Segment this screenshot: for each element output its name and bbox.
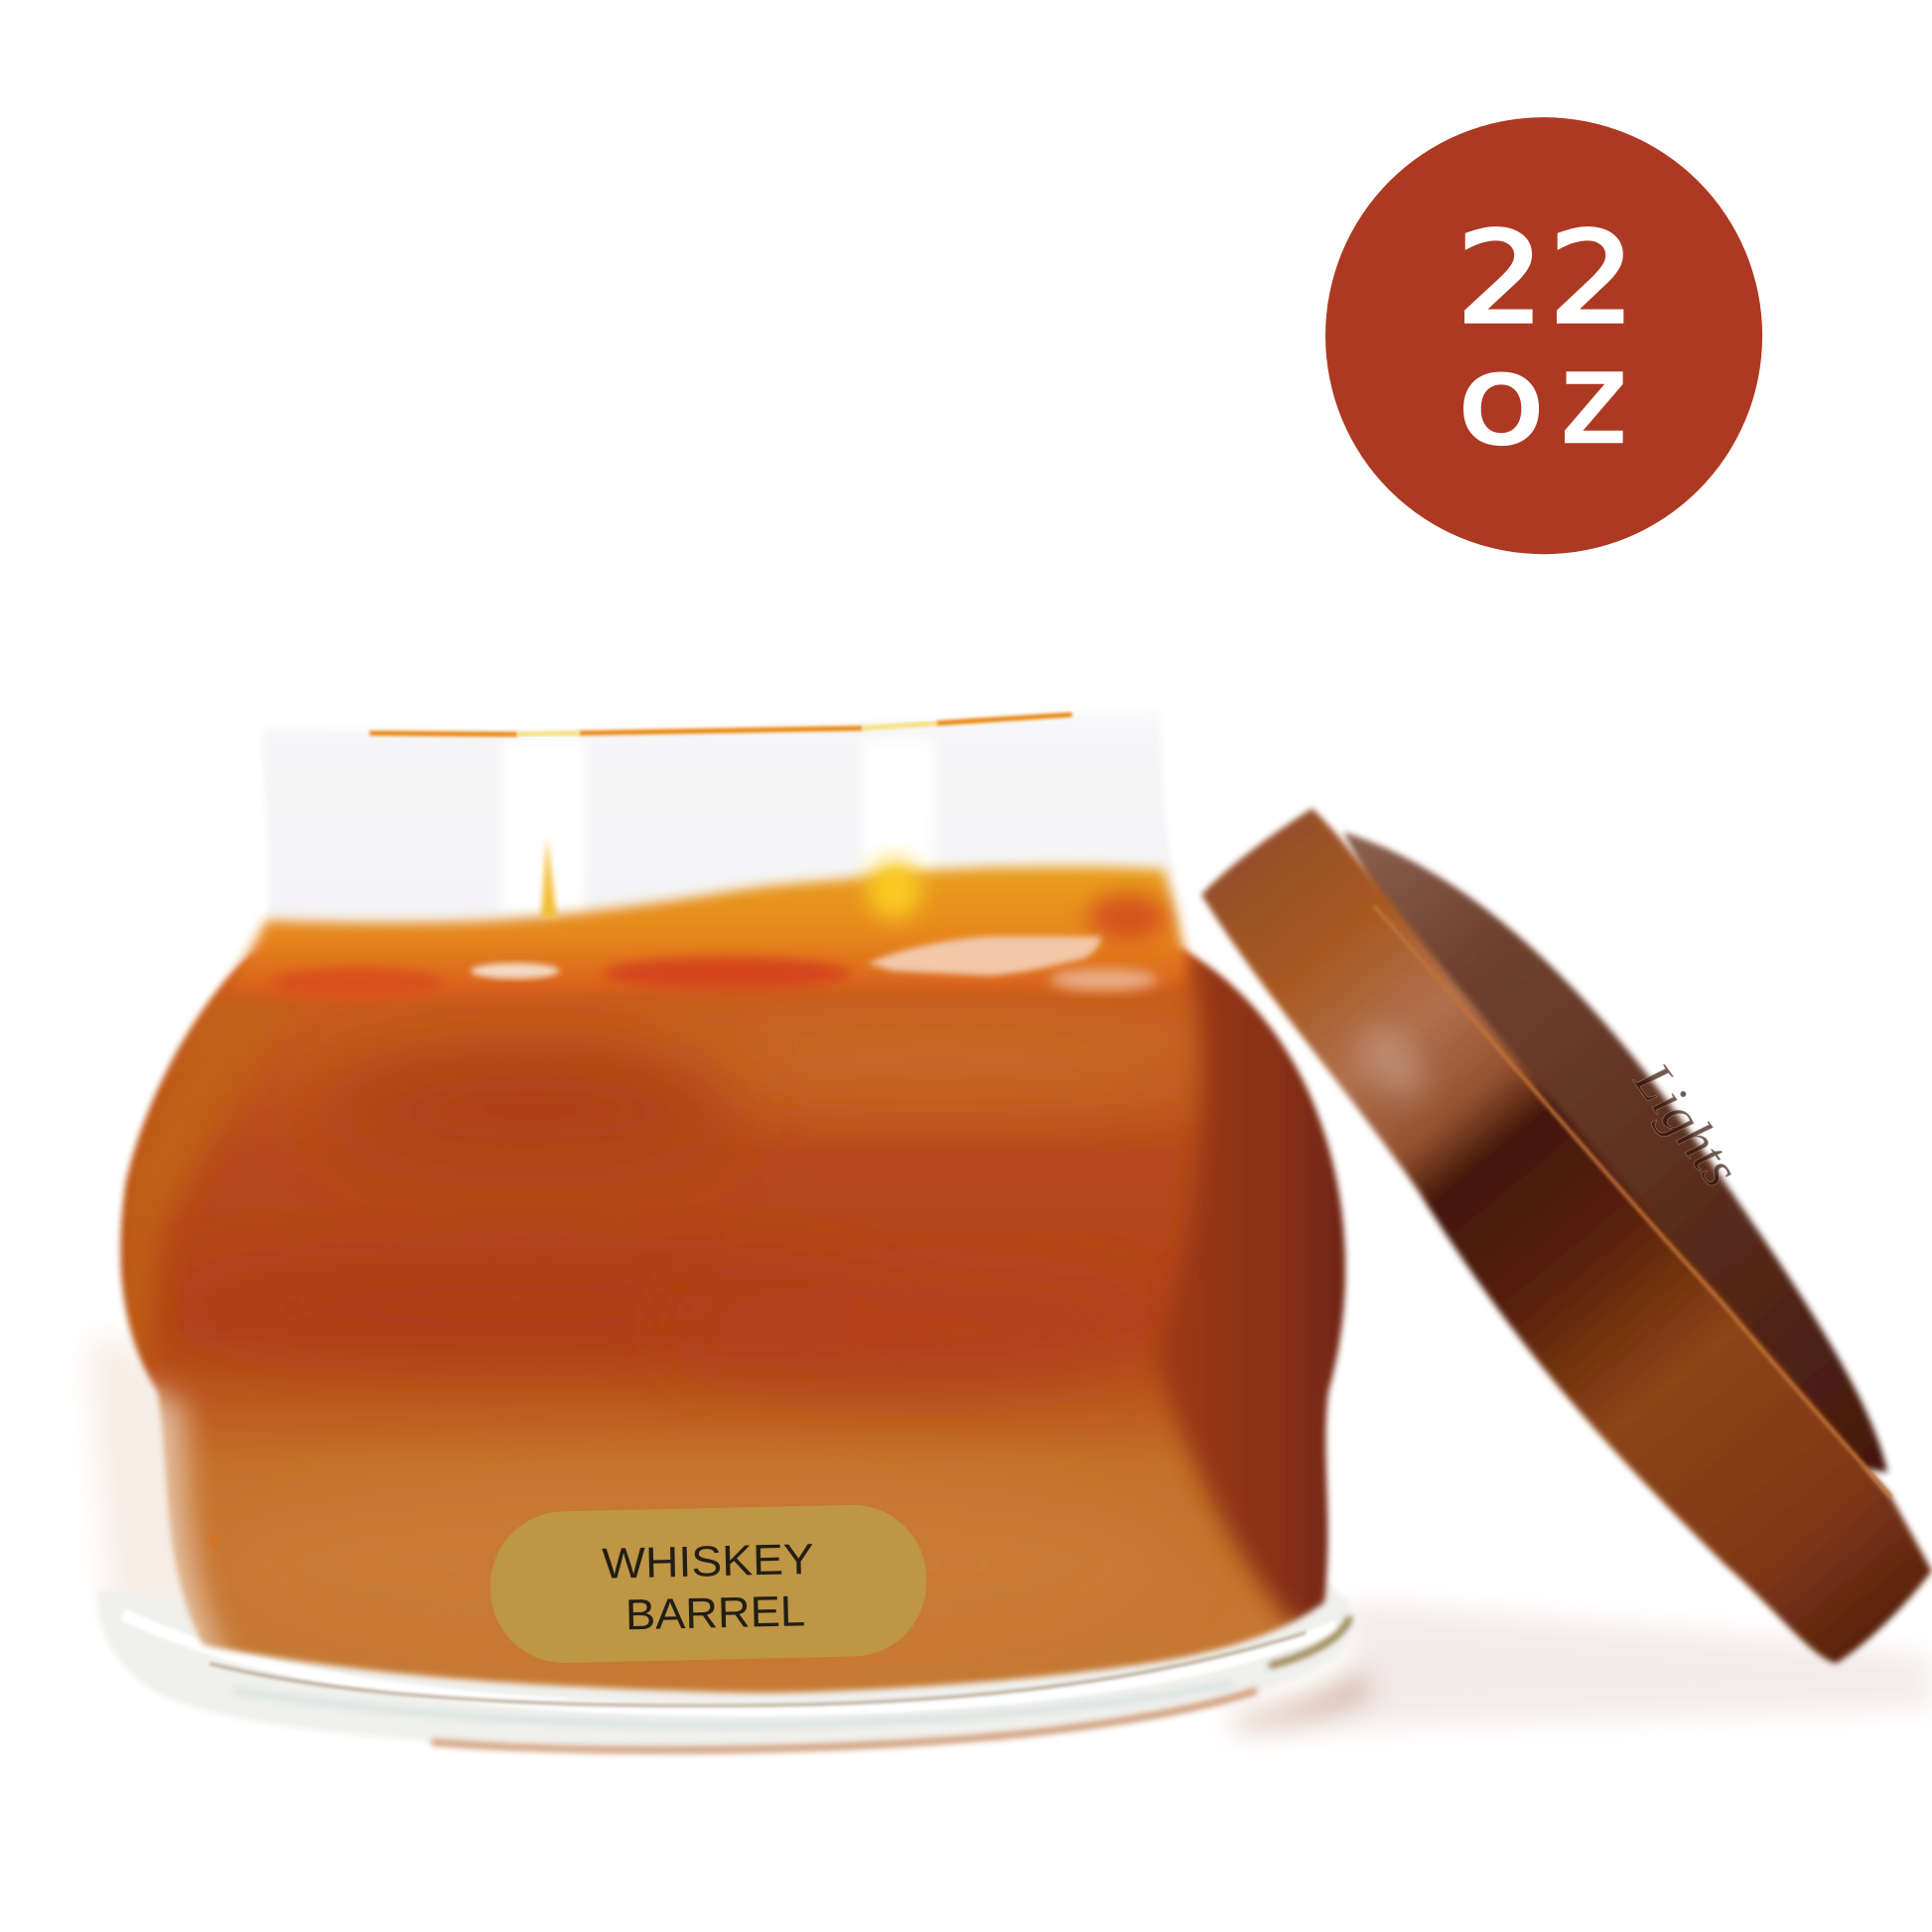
neck candle glow streaks [502,740,934,911]
label text: WHISKEY [602,1536,814,1588]
lid [1201,808,1932,1663]
lid highlight edge [1374,905,1891,1497]
candle jar [88,709,1368,1752]
badge unit [1457,326,1626,472]
badge number: 2 [1456,206,1545,351]
wax body [98,936,1368,1713]
glass ghost edge [88,1334,204,1651]
badge number [1456,206,1635,352]
left pale wax fade [129,1380,228,1663]
wax reflection left [471,963,559,979]
label shape [488,1503,928,1665]
base bottom orange edge [431,1691,1257,1750]
badge number: 2 [1549,207,1635,352]
scent label: BARREL [624,1587,806,1639]
orange rim line [369,715,1072,735]
stray wax speck [208,1535,218,1545]
dark red patches [321,1053,740,1165]
floor shadow [1232,1601,1932,1731]
red wax pool [604,957,850,990]
size badge [1325,117,1762,554]
rim candle glints [517,724,936,735]
lid soft reflection [1348,1016,1437,1108]
wax top surface [224,867,1185,998]
lid side band [1201,808,1932,1663]
base highlight lines [123,1614,1337,1711]
wax reflection right [868,936,1102,976]
lower wax tone [198,1478,1182,1651]
scent label [488,1503,928,1665]
badge circle [1325,117,1762,554]
badge unit: o [1457,329,1545,472]
right dark side [1156,949,1368,1626]
glass neck [262,709,1176,949]
badge unit: z [1561,326,1626,471]
flame glow right [868,860,921,919]
left orange edge [117,1027,242,1355]
glass base [98,1565,1351,1752]
embossed lid text: Lights [1622,1051,1751,1197]
flame glow left [541,838,557,918]
upper light band [640,1017,1232,1103]
lid top face [1343,832,1887,1472]
